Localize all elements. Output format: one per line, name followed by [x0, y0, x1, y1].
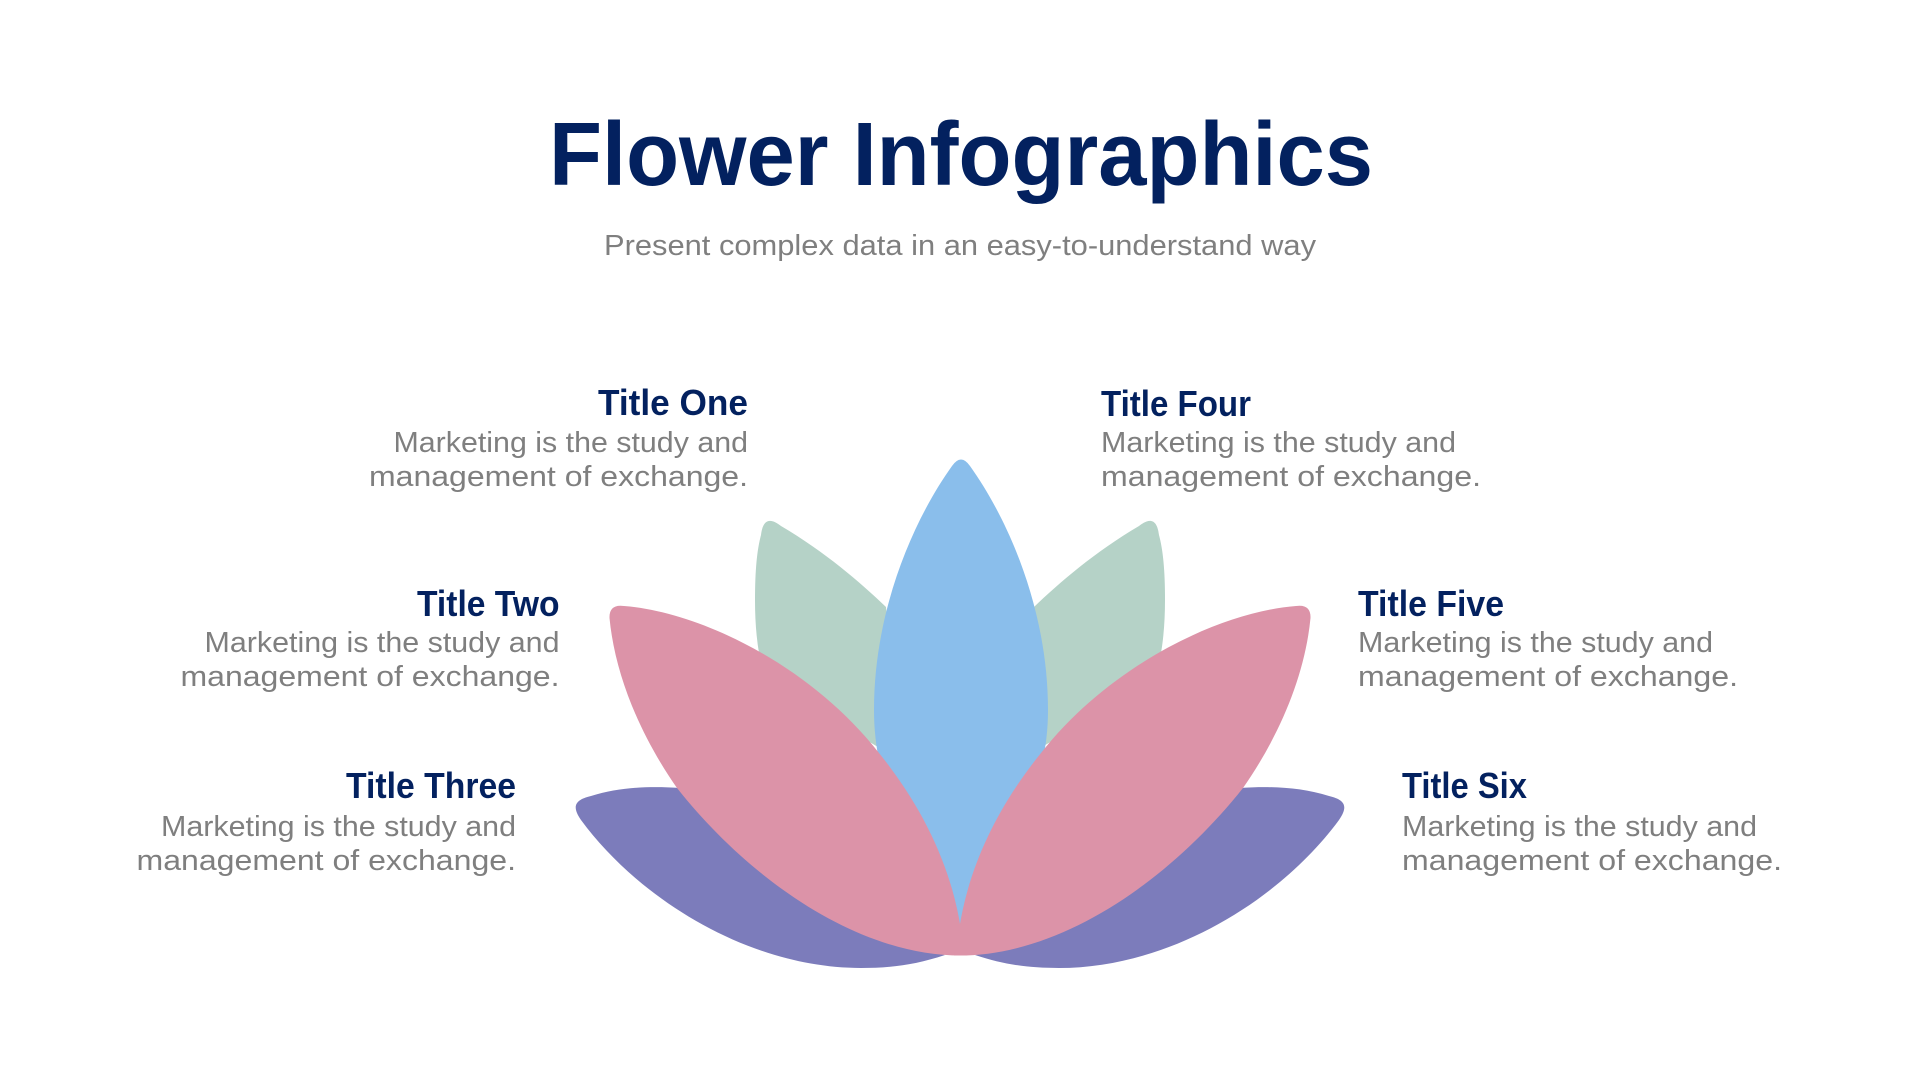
text block: title five — [1358, 583, 1738, 693]
petal: right pink — [954, 606, 1311, 956]
petal: center blue — [874, 460, 1048, 925]
petal: left pink — [609, 606, 966, 956]
text block: title three: management of exchange. — [136, 845, 516, 877]
text block: title four: management of exchange. — [1101, 461, 1481, 493]
petal: right green — [1020, 521, 1165, 760]
text block: title six — [1402, 765, 1782, 877]
text block: title two: Marketing is the study and — [204, 627, 560, 659]
text block: title two: management of exchange. — [180, 661, 560, 693]
text block: title six: Title Six — [1402, 765, 1527, 806]
subtitle: Present complex data in an easy-to-understand way — [604, 230, 1317, 262]
text block: title six: management of exchange. — [1402, 845, 1782, 877]
text block: title one: Title One — [598, 382, 748, 423]
text block: title five: Title Five — [1358, 583, 1504, 624]
title: Flower Infographics — [549, 105, 1373, 205]
petal: left green — [755, 521, 900, 760]
text block: title four — [1101, 383, 1481, 493]
text block: title two — [180, 583, 560, 693]
text block: title one: management of exchange. — [369, 461, 748, 493]
text block: title four: Marketing is the study and — [1101, 427, 1456, 459]
text block: title five: management of exchange. — [1358, 661, 1738, 693]
text block: title three: Title Three — [346, 765, 516, 806]
text block: title one: Marketing is the study and — [394, 427, 748, 459]
petal: left purple — [576, 787, 945, 968]
petal: right purple — [975, 787, 1344, 968]
text block: title three — [136, 765, 516, 877]
flower diagram — [576, 460, 1344, 968]
text block: title six: Marketing is the study and — [1402, 811, 1757, 843]
text block: title one — [369, 382, 748, 493]
text block: title three: Marketing is the study and — [161, 811, 516, 843]
text block: title four: Title Four — [1101, 383, 1251, 424]
text block: title two: Title Two — [417, 583, 560, 624]
text block: title five: Marketing is the study and — [1358, 627, 1713, 659]
